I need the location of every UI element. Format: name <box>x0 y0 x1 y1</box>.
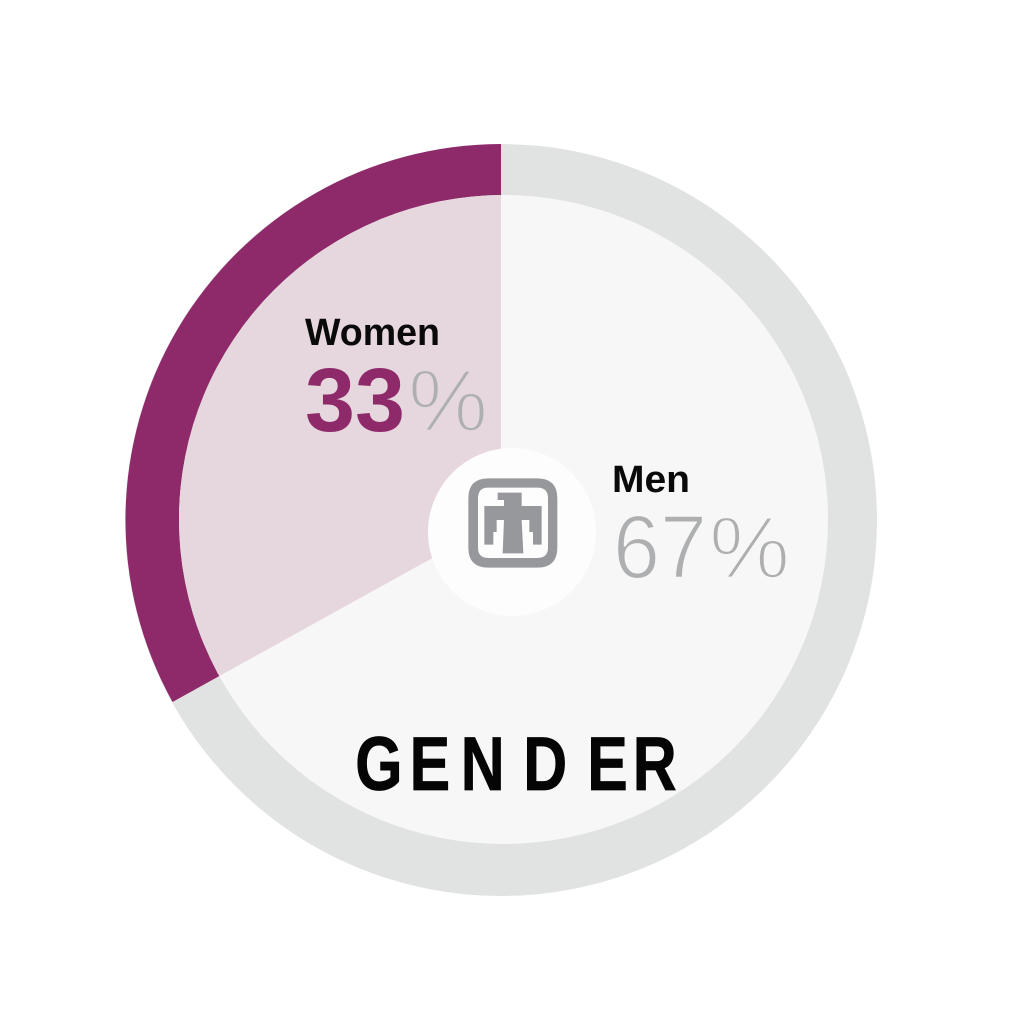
center badge with logo <box>428 448 596 616</box>
men value: 67 <box>613 498 707 598</box>
women value: 33 <box>305 351 405 451</box>
label: men 67% <box>612 459 790 598</box>
slice: women <box>179 195 501 676</box>
men percent sign: % <box>709 498 790 597</box>
label: women 33% <box>305 312 488 451</box>
center circle <box>428 448 596 616</box>
women heading: Women <box>305 312 440 354</box>
title: GENDER <box>355 722 677 807</box>
ring: women 33% <box>126 144 501 702</box>
slice: men <box>179 195 828 844</box>
icon: thunderbird logo <box>468 478 557 568</box>
ring: men 67% <box>125 144 877 896</box>
women percent sign: % <box>408 351 488 450</box>
men heading: Men <box>612 459 690 501</box>
donut chart <box>125 144 877 896</box>
gender donut infographic <box>125 144 877 896</box>
